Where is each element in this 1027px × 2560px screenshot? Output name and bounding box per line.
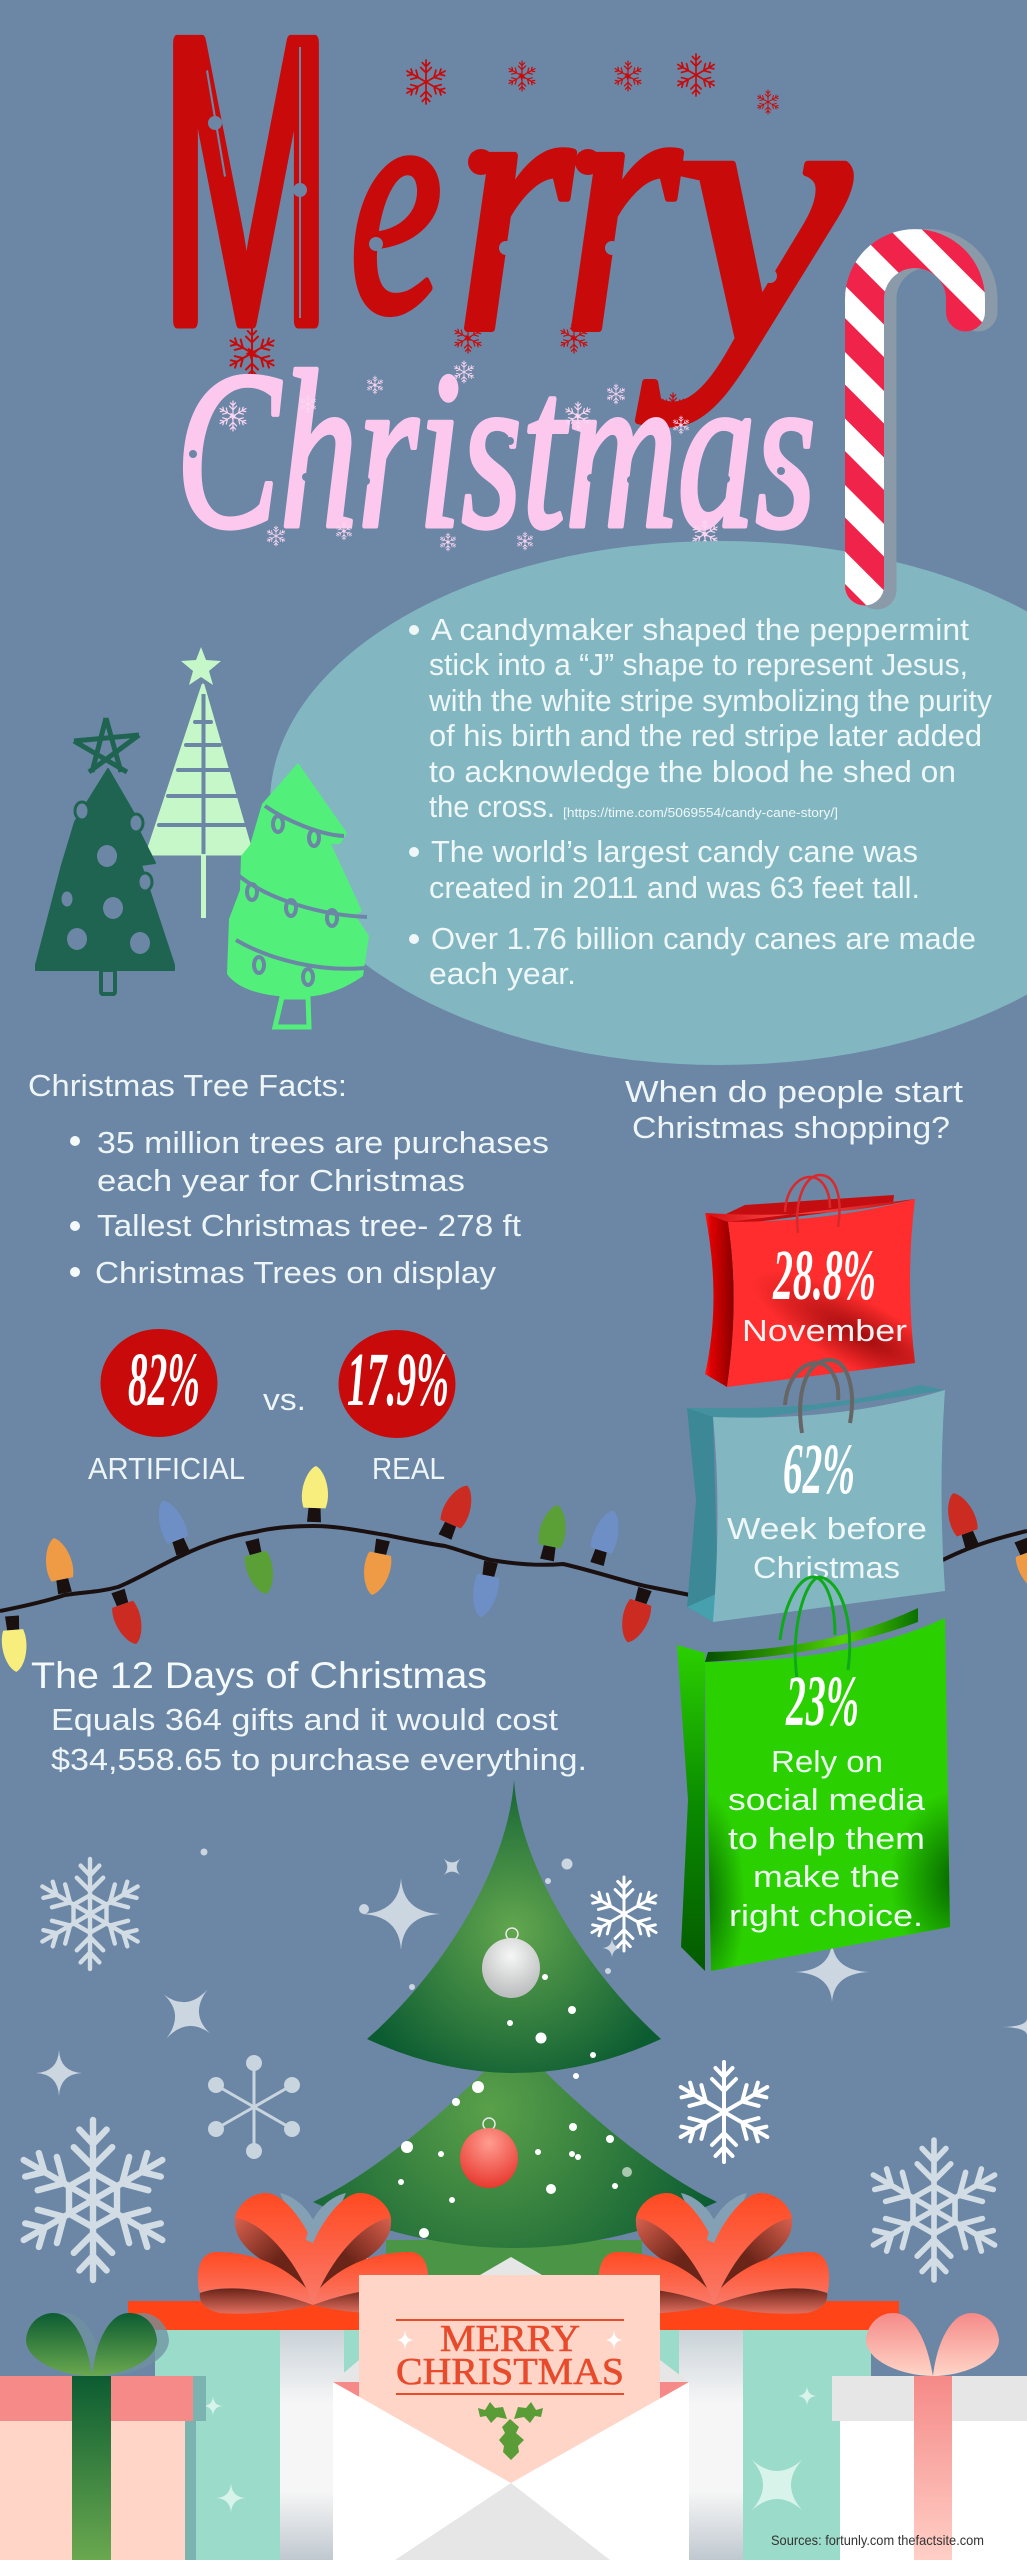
envelope front xyxy=(333,2382,689,2560)
versus label: vs. xyxy=(263,1382,306,1417)
pink snowflakes xyxy=(218,361,719,551)
stat: 17.9% real xyxy=(338,1330,456,1486)
dark green tree xyxy=(36,718,174,994)
heading: shopping question: When do people start xyxy=(625,1074,963,1109)
small gift, left xyxy=(0,2313,206,2560)
title highlights xyxy=(206,47,777,318)
panel: candy cane facts: to acknowledge the blood he shed on xyxy=(429,754,956,789)
panel: candy cane facts: Over 1.76 billion candy canes are made xyxy=(431,921,976,956)
stat: 17.9% real: REAL xyxy=(372,1451,445,1486)
stat: 82% artificial: ARTIFICIAL xyxy=(88,1451,245,1486)
silver ornament xyxy=(482,1928,540,1998)
shopping bag: green: 23% xyxy=(785,1661,859,1741)
panel: candy cane facts: created in 2011 and was 63 feet tall. xyxy=(429,870,920,905)
card greeting xyxy=(396,2318,624,2395)
panel: candy cane facts: of his birth and the red stripe later added xyxy=(429,718,982,753)
large Christmas tree xyxy=(313,1780,717,2300)
teal ellipse panel xyxy=(270,541,1027,1065)
title: Merry: y xyxy=(634,0,854,425)
stat: 82% artificial: 82% xyxy=(128,1338,200,1422)
shopping bag: green: Rely on xyxy=(771,1744,883,1779)
shopping bag: red: November xyxy=(742,1313,907,1348)
panel: candy cane facts: the cross. xyxy=(429,789,555,824)
panel: candy cane facts: The world’s largest candy cane was xyxy=(431,834,918,869)
string of lights xyxy=(0,1466,1027,1673)
text: 12 days cost xyxy=(51,1702,587,1777)
heading: shopping question xyxy=(625,1074,963,1145)
shopping bag: teal: Week before xyxy=(727,1511,927,1546)
shopping bag: green xyxy=(677,1576,950,1971)
heading: tree facts: Christmas Tree Facts: xyxy=(28,1068,347,1103)
shopping bag: teal: 62% xyxy=(783,1429,855,1509)
red snowflakes xyxy=(227,54,780,423)
stat: 17.9% real: 17.9% xyxy=(347,1338,449,1422)
small gift, right xyxy=(832,2313,1027,2560)
shopping bag: green: right choice. xyxy=(729,1898,923,1933)
red ornament xyxy=(460,2118,518,2188)
red bow, right xyxy=(599,2193,829,2314)
panel: candy cane facts: [https://time.com/5069554/candy-cane-story/] xyxy=(563,805,838,820)
shopping bag: red: 28.8% xyxy=(772,1235,876,1315)
panel: candy cane facts: each year. xyxy=(429,956,576,991)
shopping bag: red xyxy=(705,1174,915,1387)
shopping bag: green: to help them xyxy=(728,1821,925,1856)
envelope with greeting card xyxy=(333,2257,689,2560)
panel: candy cane facts: stick into a “J” shape to represent Jesus, xyxy=(429,647,968,682)
tree facts list: each year for Christmas xyxy=(97,1163,465,1198)
text: 12 days cost: $34,558.65 to purchase everything. xyxy=(51,1742,587,1777)
heading: shopping question: Christmas shopping? xyxy=(632,1110,950,1145)
red bow, left xyxy=(198,2193,428,2314)
tree facts list: Tallest Christmas tree- 278 ft xyxy=(97,1208,521,1243)
large teal gift, centre xyxy=(128,2301,899,2560)
light green tree xyxy=(147,647,252,918)
shopping bag: green: make the xyxy=(753,1859,900,1894)
text: 12 days cost: Equals 364 gifts and it would cost xyxy=(51,1702,558,1737)
card xyxy=(359,2275,660,2484)
tree facts list: Christmas Trees on display xyxy=(95,1255,497,1290)
shopping bag: teal: Christmas xyxy=(753,1550,900,1585)
holly icon xyxy=(478,2402,543,2460)
tree facts list: 35 million trees are purchases xyxy=(97,1125,549,1160)
sparkles and dots in the sky xyxy=(36,1848,1027,2096)
title: Merry: r xyxy=(562,0,685,410)
tree facts list xyxy=(70,1125,549,1290)
title: Merry xyxy=(160,0,854,425)
card greeting: CHRISTMAS xyxy=(396,2351,624,2393)
heading: 12 days of Christmas: The 12 Days of Christmas xyxy=(31,1655,487,1696)
stat: 82% artificial xyxy=(88,1329,245,1486)
panel: candy cane facts: A candymaker shaped the peppermint xyxy=(431,612,969,647)
sources: Sources: fortunly.com thefactsite.com xyxy=(771,2532,984,2548)
bright green tree xyxy=(227,763,369,1027)
shopping bag: green: social media xyxy=(728,1782,926,1817)
panel: candy cane facts xyxy=(409,612,992,991)
snowflakes in the sky xyxy=(14,1859,1003,2280)
title: Merry: e xyxy=(350,26,442,380)
card greeting: MERRY xyxy=(440,2318,580,2360)
candy cane xyxy=(864,248,978,590)
shopping bag: teal xyxy=(687,1360,945,1622)
panel: candy cane facts: with the white stripe symbolizing the purity xyxy=(428,683,992,718)
title: Merry: r xyxy=(455,0,578,410)
